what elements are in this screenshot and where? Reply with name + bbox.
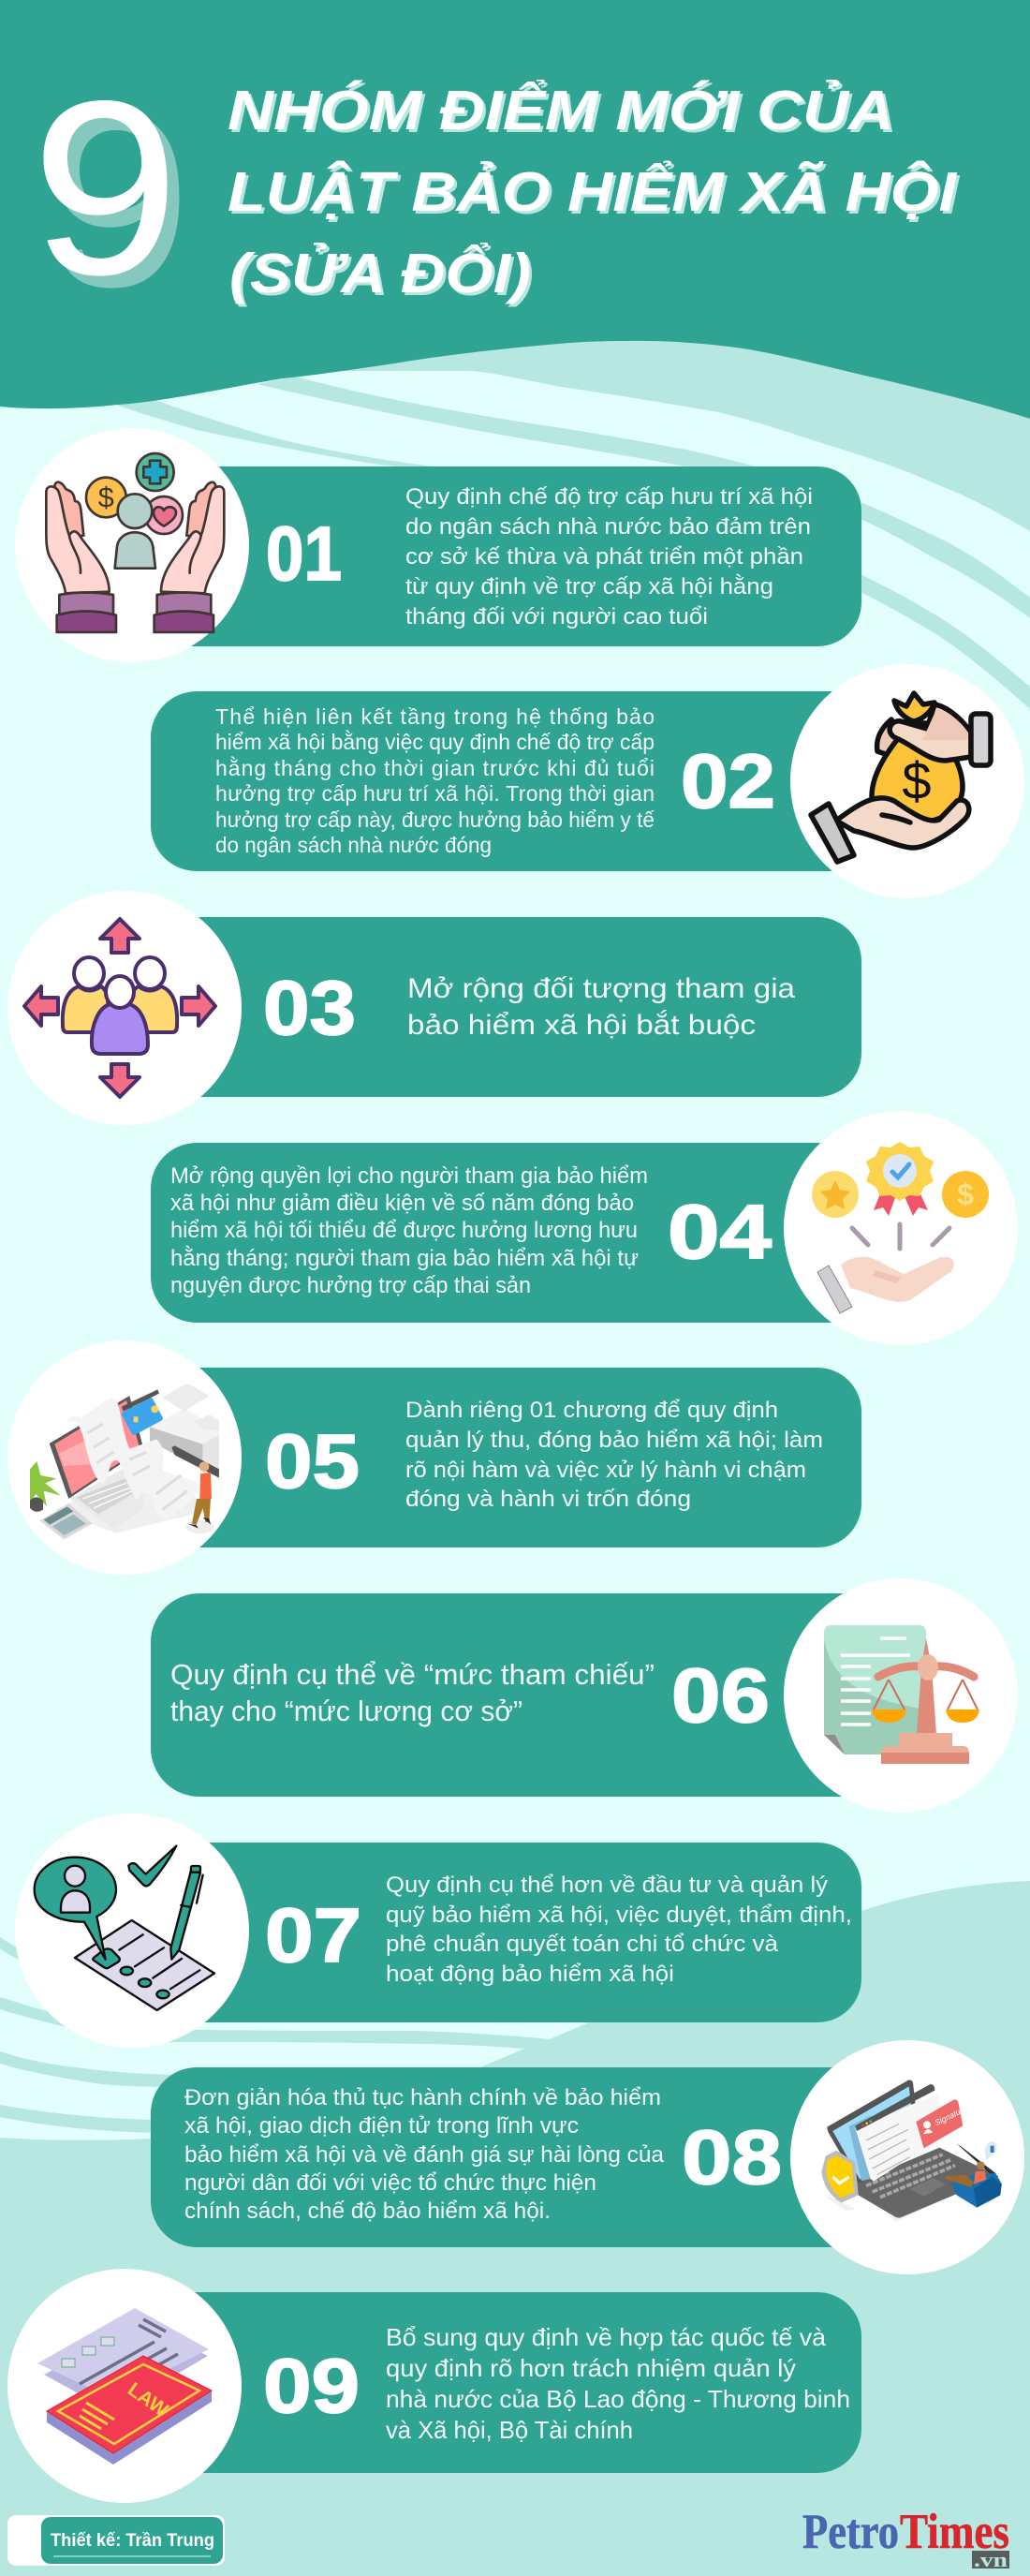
title: (SỬA ĐỔI) [229, 243, 531, 304]
number 09: 09 [263, 2344, 360, 2429]
text 06 [170, 1658, 655, 1727]
icon: laptop and invoices [30, 1384, 219, 1539]
icon circle 07 [15, 1814, 249, 2048]
text 04 [170, 1163, 648, 1298]
panel 09 [7, 2269, 861, 2503]
text 03: bảo hiểm xã hội bắt buộc [407, 1010, 756, 1041]
icon circle 09 [7, 2269, 242, 2503]
text 09 [386, 2323, 850, 2444]
text 05: quản lý thu, đóng bảo hiểm xã hội; làm [405, 1428, 823, 1453]
icon: group with arrows [24, 919, 215, 1097]
panel 03 [7, 891, 861, 1125]
text 05: đóng và hành vi trốn đóng [405, 1487, 691, 1512]
icon circle 01 [15, 428, 249, 662]
text 02: hiểm xã hội bằng việc quy định chế độ trợ cấp [215, 730, 655, 754]
icon: law book and papers [37, 2308, 212, 2465]
icon: caring hands [46, 453, 224, 632]
text 08: chính sách, chế độ bảo hiểm xã hội. [184, 2198, 551, 2224]
icon: checklist and pen [35, 1846, 214, 2010]
title: LUẬT BẢO HIỂM XÃ HỘI [228, 160, 958, 223]
icon: caring hands: $ [98, 482, 114, 514]
icon circle 04 [784, 1111, 1018, 1345]
text 07: phê chuẩn quyết toán chi tổ chức và [386, 1932, 778, 1957]
logo: PetroTimes.vn: Times [900, 2505, 1009, 2559]
number 06: 06 [671, 1653, 770, 1739]
text 06: Quy định cụ thể về “mức tham chiếu” [170, 1658, 655, 1691]
panel 07 [15, 1814, 861, 2048]
text 07: quỹ bảo hiểm xã hội, việc duyệt, thẩm định, [386, 1902, 852, 1928]
text 01: từ quy định về trợ cấp xã hội hằng [405, 574, 773, 600]
icon: laptop with shield [821, 2080, 1002, 2222]
text 03 [407, 973, 795, 1041]
icon: money bag in hands [811, 693, 991, 862]
text 05: Dành riêng 01 chương để quy định [405, 1398, 778, 1423]
icon: document and scales [824, 1625, 979, 1764]
text 01: cơ sở kế thừa và phát triển một phần [405, 544, 803, 570]
icon: laptop with shield: Signature [933, 2104, 968, 2127]
text 06: thay cho “mức lương cơ sở” [170, 1695, 522, 1727]
text 05: rõ nội hàm và việc xử lý hành vi chậm [405, 1458, 806, 1483]
icon: law book and papers: LAW [124, 2378, 172, 2421]
panel 02 [151, 664, 1024, 898]
icon: rewards and hand: $ [957, 1177, 974, 1211]
text 03: Mở rộng đối tượng tham gia [407, 973, 795, 1004]
panel 05 [7, 1340, 861, 1575]
text 08: xã hội, giao dịch điện tử trong lĩnh vực [184, 2113, 579, 2139]
number 05: 05 [265, 1419, 360, 1504]
text 08: người dân đối với việc tổ chức thực hiện [184, 2170, 596, 2196]
text 09: Bổ sung quy định về hợp tác quốc tế và [386, 2323, 827, 2351]
text 01: do ngân sách nhà nước bảo đảm trên [405, 514, 811, 540]
text 04: xã hội như giảm điều kiện về số năm đóng bảo [170, 1191, 634, 1216]
number 08: 08 [682, 2115, 782, 2200]
text 01: Quy định chế độ trợ cấp hưu trí xã hội [405, 484, 813, 510]
text 08: bảo hiểm xã hội và về đánh giá sự hài lòng của [184, 2142, 664, 2168]
text 05 [405, 1398, 823, 1512]
number 07: 07 [265, 1893, 361, 1978]
icon: money bag in hands: $ [902, 751, 932, 810]
icon circle 08 [790, 2040, 1024, 2274]
text 04: nguyện được hưởng trợ cấp thai sản [170, 1273, 531, 1298]
text 09: nhà nước của Bộ Lao động - Thương binh [386, 2385, 850, 2413]
icon circle 05 [7, 1340, 242, 1575]
text 08: Đơn giản hóa thủ tục hành chính về bảo hiểm [184, 2085, 661, 2110]
number 03: 03 [263, 966, 356, 1051]
text 02 [215, 704, 655, 857]
text 07: Quy định cụ thể hơn về đầu tư và quản lý [386, 1873, 829, 1898]
text 02: hằng tháng cho thời gian trước khi đủ tuổi [215, 756, 655, 780]
icon circle 02 [790, 664, 1024, 898]
panel 06 [151, 1578, 1018, 1813]
title: NHÓM ĐIỂM MỚI CỦA [228, 80, 894, 141]
title [228, 80, 958, 304]
text 04: hằng tháng; người tham gia bảo hiểm xã hội tự [170, 1246, 639, 1271]
text 01 [405, 484, 813, 629]
logo: PetroTimes.vn [802, 2505, 1009, 2571]
logo: PetroTimes.vn: Petro [802, 2505, 899, 2559]
text 02: do ngân sách nhà nước đóng [215, 833, 492, 857]
text 02: Thể hiện liên kết tầng trong hệ thống bảo [215, 704, 655, 729]
number 02: 02 [681, 739, 775, 824]
text 02: hưởng trợ cấp này, được hưởng bảo hiểm y tế [215, 807, 655, 832]
text 04: Mở rộng quyền lợi cho người tham gia bảo hiểm [170, 1163, 648, 1189]
panel 04 [151, 1111, 1018, 1345]
big number 9: 9 [31, 50, 180, 327]
panel 01 [15, 428, 861, 662]
text 04: hiểm xã hội tối thiểu để được hưởng lương hưu [170, 1218, 638, 1243]
header banner [0, 0, 1030, 419]
designer credit [7, 2515, 225, 2566]
text 08 [184, 2085, 664, 2224]
icon: rewards and hand [812, 1142, 989, 1313]
icon circle 06 [784, 1578, 1018, 1813]
text 07 [386, 1873, 852, 1987]
text 09: và Xã hội, Bộ Tài chính [386, 2416, 633, 2444]
text 01: tháng đối với người cao tuổi [405, 604, 708, 629]
number 01: 01 [266, 511, 342, 597]
panel 08 [151, 2040, 1024, 2274]
designer credit: Thiết kế: Trần Trung [51, 2531, 214, 2551]
text 09: quy định rõ hơn trách nhiệm quản lý [386, 2354, 796, 2382]
text 07: hoạt động bảo hiểm xã hội [386, 1962, 674, 1987]
icon circle 03 [7, 891, 242, 1125]
logo: PetroTimes.vn: .vn [974, 2548, 1008, 2571]
text 02: hưởng trợ cấp hưu trí xã hội. Trong thời gian [215, 781, 655, 806]
number 04: 04 [668, 1190, 772, 1275]
